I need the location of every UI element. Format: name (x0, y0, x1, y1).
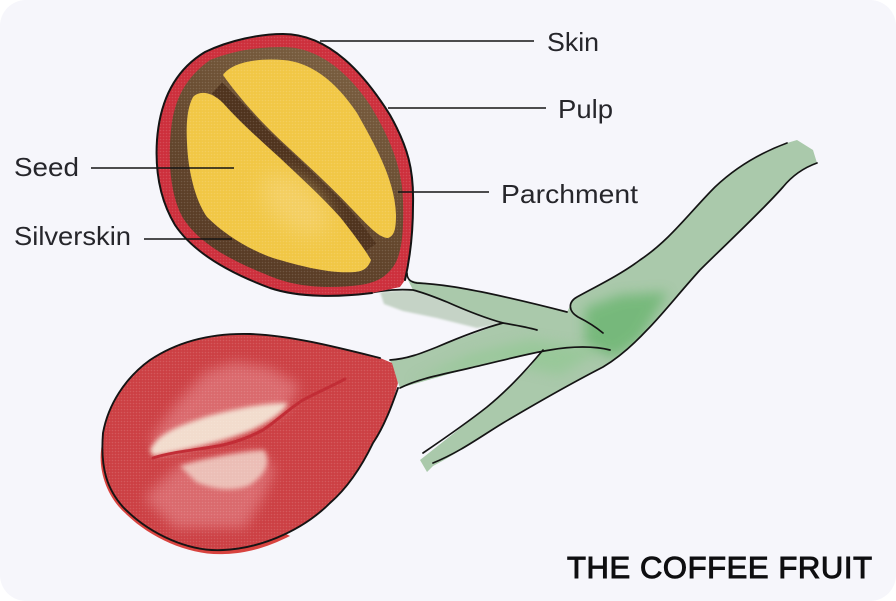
outer ink outline (157, 34, 413, 296)
label: Seed: Seed (14, 152, 79, 182)
seed divider (217, 88, 370, 248)
pulp layer: brown (170, 47, 403, 287)
stem: ink outlines (370, 143, 817, 463)
ink outline (102, 334, 398, 550)
pale highlight above the seam (150, 403, 288, 456)
illustration: whole red fruit (95, 330, 405, 555)
seed: lower half (187, 93, 371, 272)
seed highlight (250, 162, 340, 248)
fruit body (102, 334, 398, 550)
pale highlight below the seam (180, 450, 267, 489)
seam (153, 379, 345, 458)
label: Parchment: Parchment (501, 179, 639, 209)
title: THE COFFEE FRUIT (567, 550, 872, 585)
pink bloom below the seam (144, 450, 275, 528)
stem: saturated green patch (440, 286, 670, 376)
label: Silverskin: Silverskin (14, 221, 131, 251)
seed: upper half (223, 60, 396, 238)
stem: green fill (390, 140, 817, 472)
skin layer: red (157, 34, 413, 296)
stem: pale band under top fruit (380, 289, 505, 328)
pink bloom above the seam (150, 362, 300, 455)
label: Skin: Skin (547, 27, 599, 57)
leader lines (91, 41, 546, 239)
halftone texture (157, 34, 413, 296)
colour overrun at lower left (101, 440, 290, 554)
halftone texture (95, 330, 405, 555)
label: Pulp: Pulp (558, 94, 613, 124)
illustration: top fruit cross-section (157, 34, 413, 296)
illustration: lower stem and branches (370, 140, 817, 472)
